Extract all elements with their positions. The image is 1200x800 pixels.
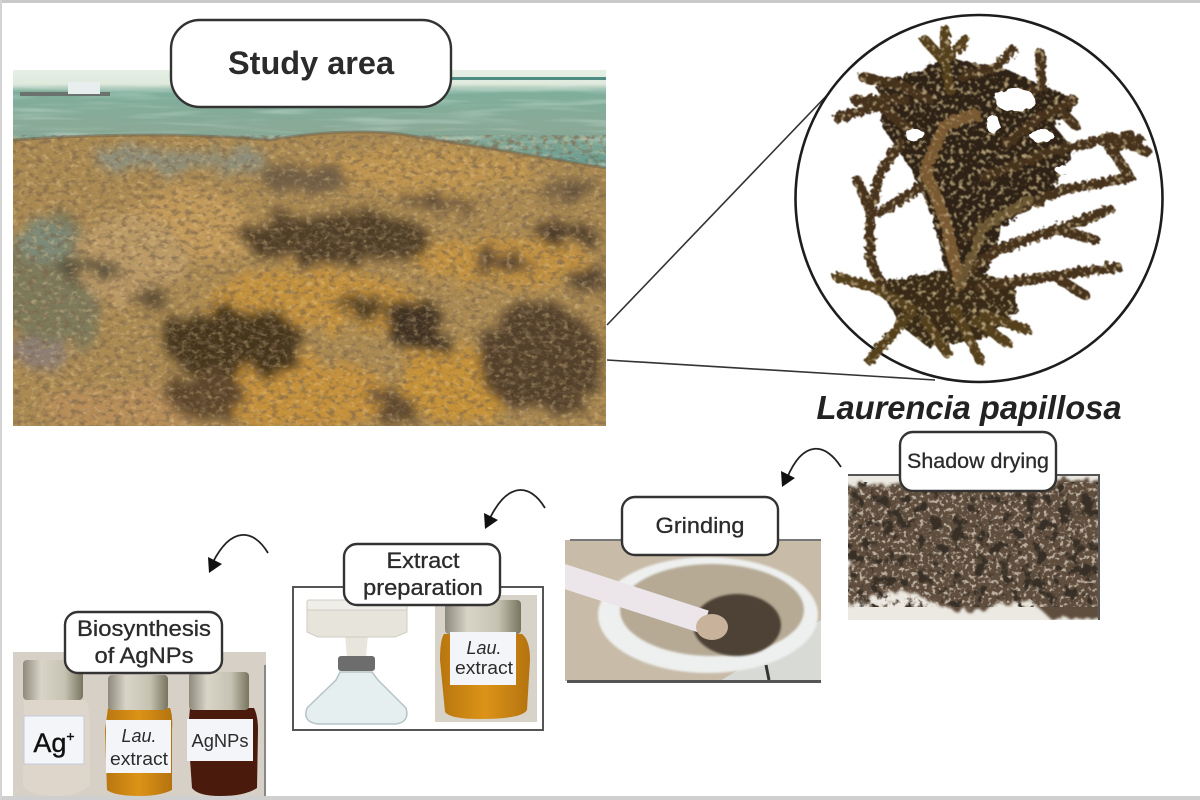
jar: silver solution	[23, 660, 83, 700]
zoom line: upper connector	[607, 90, 832, 325]
label: extract preparation: preparation	[363, 575, 483, 600]
label: Ag+: +	[66, 728, 75, 744]
panel: extract preparation	[293, 544, 543, 730]
photo: mortar and pestle	[560, 540, 821, 681]
label: biosynthesis of AgNPs	[65, 612, 222, 673]
gaps between seaweed branches	[905, 88, 1106, 174]
label: Lau. extract	[106, 720, 171, 773]
label: Lau. extract: Lau.	[121, 726, 157, 746]
label: study area	[171, 20, 451, 107]
arrow: shadow drying to grinding	[781, 449, 841, 487]
photo: dried seaweed	[848, 474, 1100, 620]
label: study area: Study area	[228, 45, 394, 81]
photo: jar of extract	[435, 595, 537, 722]
label: extract preparation: Extract	[386, 548, 460, 573]
panel: shadow drying	[848, 432, 1100, 620]
panel: biosynthesis of AgNPs	[13, 612, 266, 796]
species name: Laurencia papillosa	[816, 389, 1122, 426]
label: extract preparation	[344, 544, 500, 605]
arrow: extract preparation to biosynthesis	[208, 535, 268, 573]
icon: filtration funnel on flask	[306, 600, 407, 724]
label: Lau. extract: extract	[455, 658, 513, 678]
photo: study area reef and sea	[5, 70, 612, 432]
label: AgNPs	[187, 719, 253, 761]
label: grinding: Grinding	[656, 513, 744, 538]
label: Lau. extract: extract	[110, 749, 168, 769]
zoom line: lower connector	[607, 360, 935, 380]
label: biosynthesis of AgNPs: of AgNPs	[94, 643, 194, 668]
label: Ag+: Ag	[33, 728, 66, 758]
label: Ag+	[24, 716, 84, 764]
label: AgNPs: AgNPs	[192, 731, 248, 751]
label: shadow drying: Shadow drying	[907, 450, 1049, 473]
label: Lau. extract	[450, 632, 516, 685]
panel: grinding	[560, 497, 821, 683]
label: Lau. extract: Lau.	[466, 638, 502, 658]
label: grinding	[622, 497, 778, 555]
label: shadow drying	[900, 432, 1056, 491]
label: biosynthesis of AgNPs: Biosynthesis	[77, 616, 211, 641]
arrow: grinding to extract preparation	[484, 490, 545, 529]
photo: three jars	[13, 652, 266, 796]
jar: AgNPs	[188, 672, 258, 796]
icon: seaweed magnified in circle	[796, 15, 1162, 382]
jar: Lau. extract	[105, 675, 172, 796]
